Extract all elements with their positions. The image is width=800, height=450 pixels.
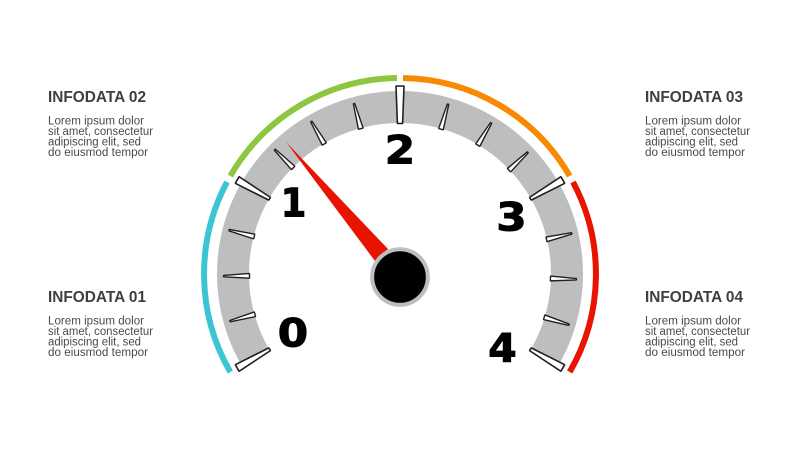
text block: infodata 02: INFODATA 02 — [48, 89, 146, 106]
text block: infodata 01: do eiusmod tempor — [48, 347, 148, 359]
text block: infodata 02: Lorem ipsum dolor — [48, 115, 144, 127]
arc: red segment — [570, 182, 596, 372]
major tick marks — [235, 86, 565, 371]
text block: infodata 02 — [48, 89, 153, 159]
text block: infodata 01 — [48, 289, 153, 359]
text block: infodata 04: do eiusmod tempor — [645, 347, 745, 359]
needle hub — [372, 249, 428, 305]
arc: green segment — [230, 78, 397, 176]
text block: infodata 03: Lorem ipsum dolor — [645, 115, 741, 127]
text block: infodata 04: adipiscing elit, sed — [645, 337, 738, 349]
text block: infodata 03 — [645, 89, 750, 159]
arc: cyan segment — [204, 182, 230, 372]
text block: infodata 03: adipiscing elit, sed — [645, 137, 738, 149]
gauge number 3: 3 — [496, 195, 527, 240]
arc: orange segment — [403, 78, 570, 176]
text block: infodata 01: adipiscing elit, sed — [48, 337, 141, 349]
text block: infodata 03: do eiusmod tempor — [645, 147, 745, 159]
text block: infodata 02: adipiscing elit, sed — [48, 137, 141, 149]
minor tick marks — [223, 103, 576, 327]
text block: infodata 01: sit amet, consectetur — [48, 326, 153, 338]
gauge dial band — [233, 107, 567, 358]
gauge number 1: 1 — [281, 181, 306, 226]
gauge number 4: 4 — [488, 326, 517, 371]
text block: infodata 01: INFODATA 01 — [48, 289, 146, 306]
text block: infodata 02: do eiusmod tempor — [48, 147, 148, 159]
text block: infodata 04: Lorem ipsum dolor — [645, 315, 741, 327]
gauge number 0: 0 — [278, 311, 308, 356]
text block: infodata 01: Lorem ipsum dolor — [48, 315, 144, 327]
text block: infodata 03: sit amet, consectetur — [645, 126, 750, 138]
text block: infodata 04: INFODATA 04 — [645, 289, 743, 306]
text block: infodata 04 — [645, 289, 750, 359]
gauge number 2: 2 — [385, 128, 415, 173]
text block: infodata 02: sit amet, consectetur — [48, 126, 153, 138]
text block: infodata 03: INFODATA 03 — [645, 89, 743, 106]
text block: infodata 04: sit amet, consectetur — [645, 326, 750, 338]
needle — [286, 142, 388, 261]
